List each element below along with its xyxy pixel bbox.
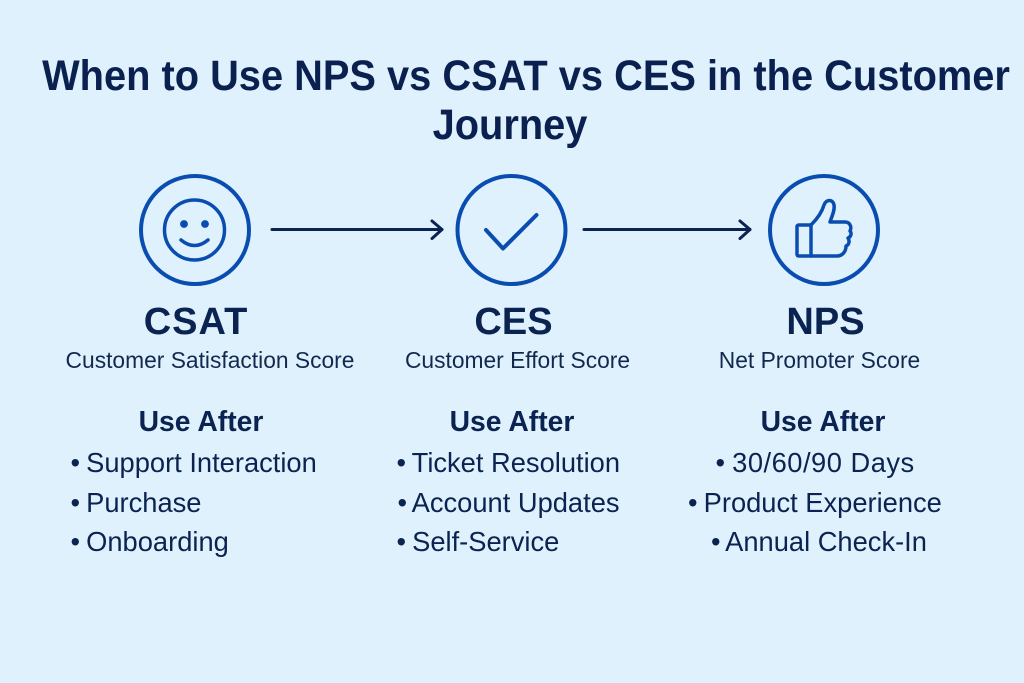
list: CSAT moments: • Support Interaction — [70, 447, 317, 478]
text: CES full name: Customer Effort Score — [405, 347, 630, 373]
list: NPS moments: • Product Experience — [688, 486, 942, 518]
title — [42, 52, 1010, 149]
text: CSAT full name: Customer Satisfaction Score — [66, 347, 354, 373]
journey icons and arrows — [139, 174, 880, 286]
heading: CES use after: Use After — [450, 405, 574, 437]
arrow: CES to NPS — [584, 221, 750, 238]
heading: CSAT use after: Use After — [139, 405, 263, 437]
title: When to Use NPS vs CSAT vs CES in the Customer — [42, 52, 1010, 100]
heading: CSAT: CSAT — [144, 301, 248, 343]
title: Journey — [433, 101, 587, 149]
icon: thumbs up — [770, 176, 878, 284]
heading: NPS: NPS — [786, 301, 865, 343]
icon: smiley face — [141, 176, 249, 284]
arrow: CSAT to CES — [272, 221, 442, 238]
icon: check mark — [458, 176, 566, 284]
list: CES moments: • Self-Service — [396, 526, 559, 557]
heading: CES: CES — [474, 301, 553, 343]
list: CES moments: • Account Updates — [398, 486, 620, 518]
list: CSAT moments: • Purchase — [70, 486, 201, 518]
heading: NPS use after: Use After — [761, 405, 885, 437]
text: NPS full name: Net Promoter Score — [719, 347, 920, 373]
list: CSAT moments: • Onboarding — [70, 526, 229, 557]
list: NPS moments: • Annual Check-In — [711, 526, 927, 557]
list: NPS moments: • 30/60/90 Days — [716, 447, 915, 478]
list: CES moments: • Ticket Resolution — [396, 447, 620, 478]
